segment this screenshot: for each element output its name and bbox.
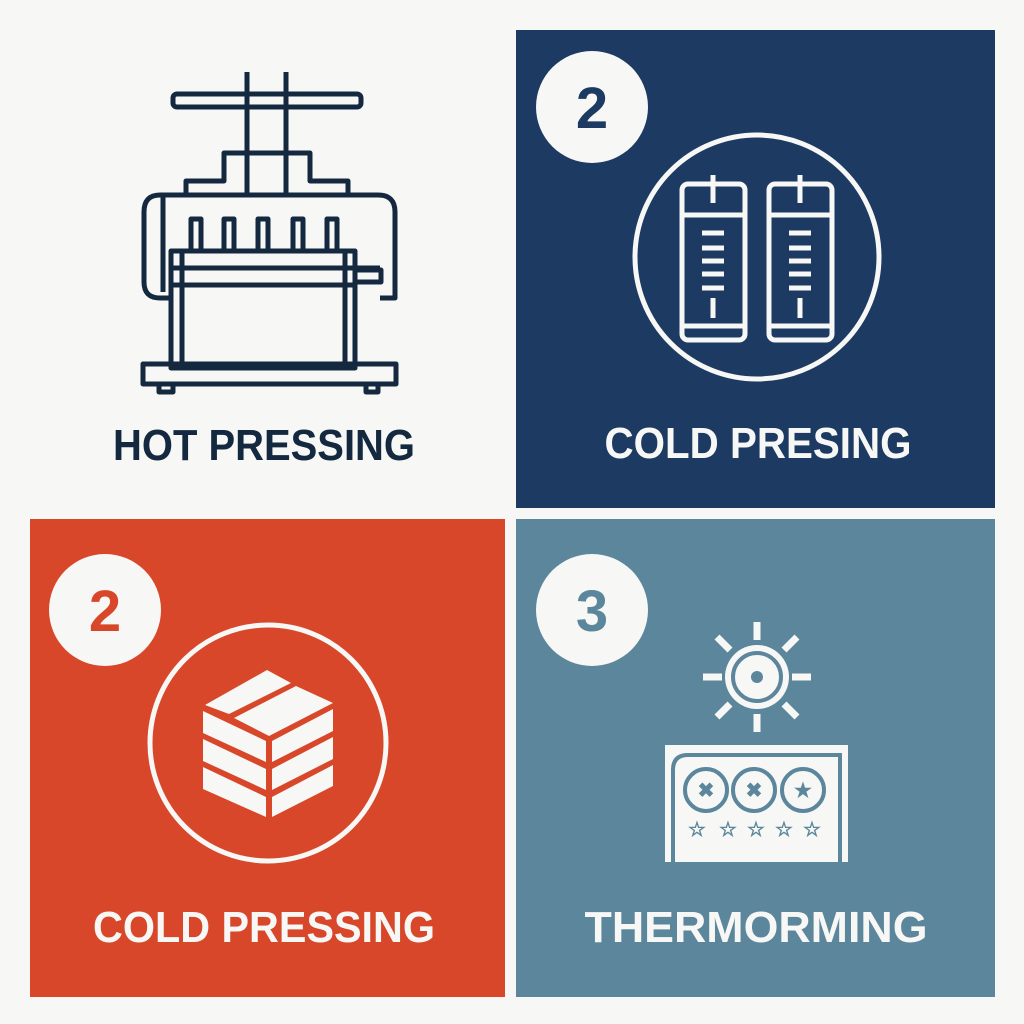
panel: hot pressing xyxy=(113,72,415,470)
icon: forming tray: ☆ xyxy=(688,819,706,841)
icon: forming tray: ✖ xyxy=(698,780,714,802)
heading: cold pressing: COLD PRESSING xyxy=(93,903,435,952)
panel: cold presing navy xyxy=(516,30,995,508)
icon: forming tray: ★ xyxy=(794,780,812,802)
badge: number 2: 2 xyxy=(89,579,121,644)
icon: sun xyxy=(703,622,811,732)
badge: number 3: 3 xyxy=(576,579,608,644)
badge: number 2: 2 xyxy=(576,76,608,141)
icon: two cylinders in circle xyxy=(635,135,879,379)
heading: cold presing: COLD PRESING xyxy=(604,419,912,468)
icon: forming tray xyxy=(665,745,848,862)
icon: hot press machine xyxy=(143,72,396,392)
badge: number 2 xyxy=(49,554,161,666)
badge: number 3 xyxy=(536,554,648,666)
heading: thermorming: THERMORMING xyxy=(584,903,928,952)
icon: stacked box in circle xyxy=(150,625,386,861)
icon: forming tray: ☆ xyxy=(775,819,793,841)
icon: forming tray: ☆ xyxy=(747,819,765,841)
panel: cold pressing orange xyxy=(30,519,505,997)
icon: forming tray: ☆ xyxy=(719,819,737,841)
icon: forming tray: ☆ xyxy=(803,819,821,841)
icon: forming tray: ✖ xyxy=(746,780,762,802)
badge: number 2 xyxy=(536,51,648,163)
heading: hot pressing: HOT PRESSING xyxy=(113,421,415,470)
panel: thermoforming xyxy=(516,519,995,997)
